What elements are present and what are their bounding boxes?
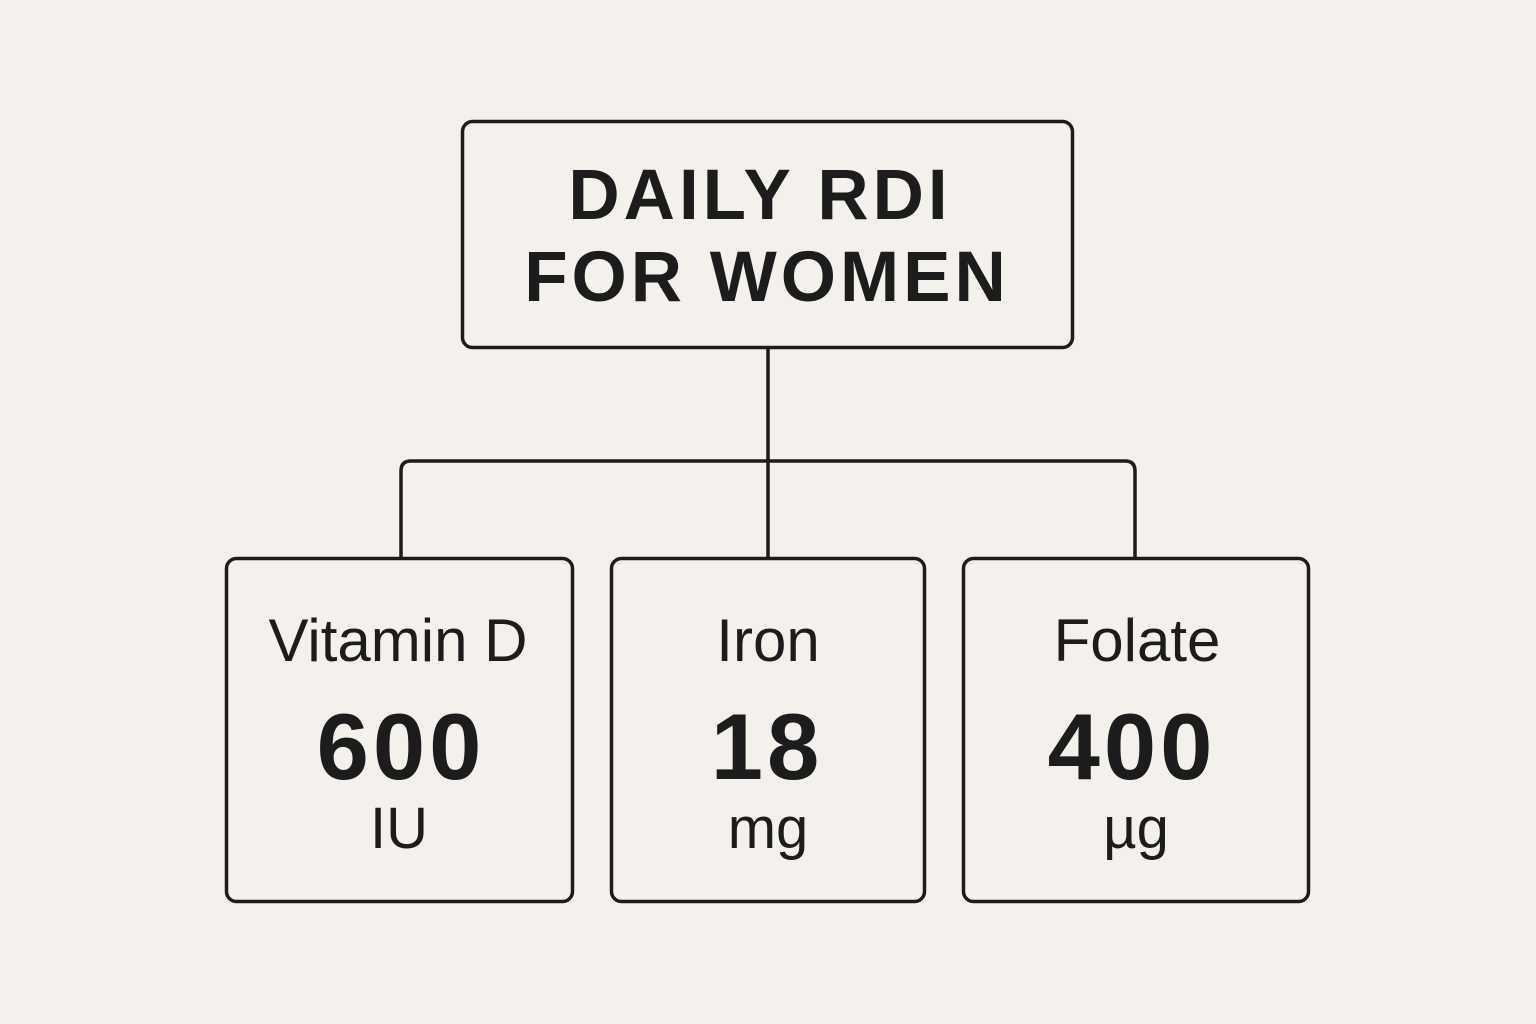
connector lines bbox=[401, 348, 1135, 557]
title text bbox=[524, 156, 1010, 317]
panel: Iron: mg bbox=[728, 796, 808, 861]
panel: Iron bbox=[612, 558, 924, 902]
title text: FOR WOMEN bbox=[524, 238, 1010, 317]
panel: Vitamin D bbox=[226, 558, 572, 902]
title text: DAILY RDI bbox=[568, 156, 952, 235]
panel: Folate: µg bbox=[1103, 796, 1169, 861]
panel: Iron: Iron bbox=[716, 607, 820, 674]
panel: Vitamin D: IU bbox=[370, 796, 428, 861]
panel: Folate bbox=[964, 558, 1308, 902]
panel: Vitamin D: Vitamin D bbox=[269, 607, 527, 674]
panel: Iron: 18 bbox=[711, 694, 823, 799]
panel: Folate: Folate bbox=[1054, 607, 1220, 674]
title box bbox=[462, 122, 1072, 348]
panel: Folate: 400 bbox=[1048, 694, 1216, 799]
panel: Vitamin D: 600 bbox=[317, 694, 485, 799]
